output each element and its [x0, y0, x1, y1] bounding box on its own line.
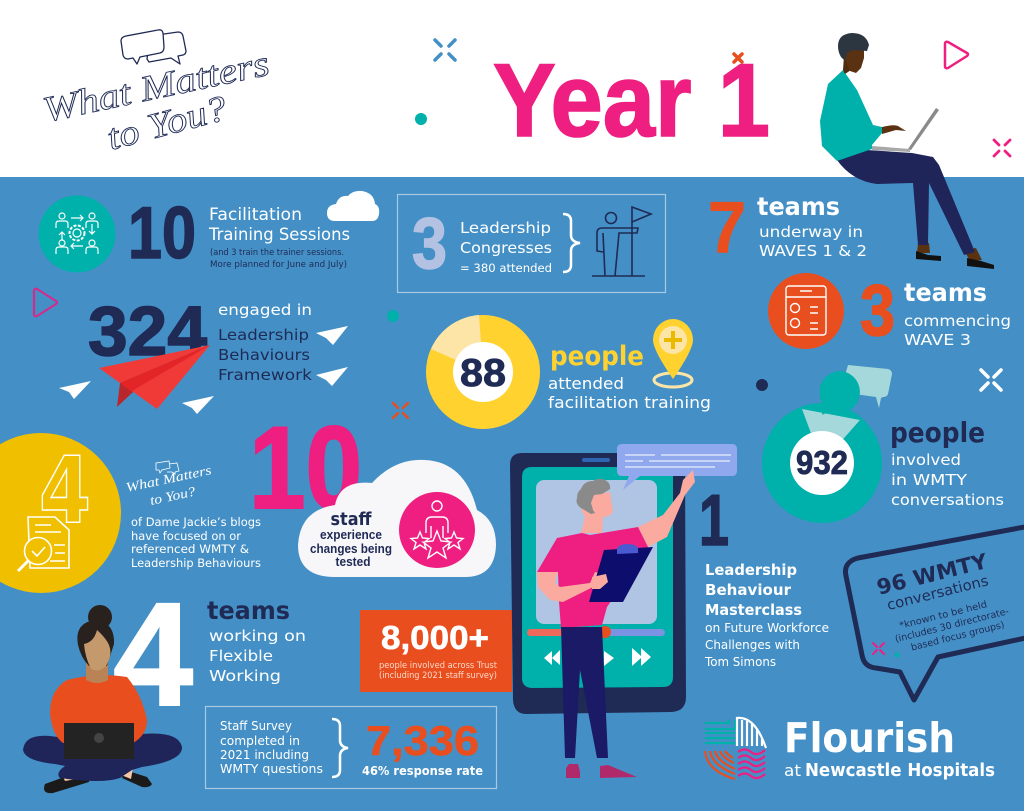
logo wording: What Matters	[39, 43, 273, 130]
donut chart: 932	[762, 403, 882, 523]
tablet	[510, 453, 686, 714]
masterclass text: Behaviour	[705, 581, 792, 599]
stat: 7 teams: WAVES 1 & 2	[759, 242, 867, 260]
engaged text	[218, 301, 312, 384]
cloud text: changes being	[310, 542, 392, 556]
stat: 10 staff experience changes	[249, 402, 496, 577]
stat: 4 teams flexible working: Flexible	[209, 647, 273, 665]
donut chart: 88	[426, 315, 540, 429]
engaged text: Framework	[218, 366, 312, 384]
cloud text: tested	[336, 555, 370, 569]
illustration: woman with laptop	[23, 605, 182, 793]
cloud text: experience	[320, 528, 382, 542]
outlined number 4: 4	[39, 437, 91, 544]
stat: 932 people: conversations	[891, 491, 1004, 509]
masterclass text: Leadership	[705, 561, 797, 579]
bubble text: conversations	[885, 573, 990, 614]
title: Year 1	[493, 43, 770, 159]
masterclass text: Masterclass	[705, 601, 802, 619]
bubble text: *known to be held	[898, 599, 988, 632]
pale speech bubble	[840, 365, 892, 408]
masterclass text: on Future Workforce	[705, 621, 829, 635]
text: teams	[207, 596, 290, 625]
donut chart: 88: 88	[460, 352, 506, 395]
stat: 3 teams: 3	[860, 271, 895, 351]
stat: 3 teams: WAVE 3	[904, 331, 971, 349]
number 10: 10	[249, 402, 362, 533]
decorative dots and marks	[387, 310, 1001, 418]
number 3: 3	[412, 204, 447, 284]
stat: 88 people: attended	[548, 374, 624, 393]
small note: (and 3 train the trainer sessions.	[210, 248, 344, 258]
survey text: WMTY questions	[220, 762, 323, 776]
stat: 7 teams: teams	[757, 192, 840, 221]
cloud text: staff	[330, 509, 372, 530]
icon: person with flag	[592, 207, 651, 276]
blog text: have focused on or	[131, 529, 241, 543]
engaged text: Leadership	[218, 326, 309, 344]
stat: 1 masterclass	[699, 481, 829, 669]
response rate: 46% response rate	[362, 763, 483, 778]
masterclass text	[704, 561, 829, 669]
brace	[563, 214, 580, 272]
congress text: Congresses	[460, 239, 552, 257]
callout: 8,000+: (including 2021 staff survey)	[379, 671, 497, 681]
stat: 324 engaged	[34, 289, 348, 414]
panel: leadership congresses	[398, 194, 666, 292]
stat: 4 teams flexible working	[113, 573, 306, 737]
icon: play triangle	[34, 289, 57, 316]
number 7,336: 7,336	[366, 717, 479, 764]
stat: 932 people: involved	[891, 451, 961, 469]
number 10: 10	[128, 193, 196, 274]
stat: 88 people: facilitation training	[548, 393, 711, 412]
stat: 88 people	[426, 315, 711, 429]
blog text: Leadership Behaviours	[131, 556, 261, 570]
logo: Flourish at Newcastle Hospitals: at	[784, 761, 801, 780]
masterclass text: Challenges with	[705, 638, 800, 652]
cloud	[298, 460, 496, 577]
survey text	[220, 719, 323, 776]
blog text	[131, 515, 261, 570]
congress text: = 380 attended	[460, 261, 552, 275]
survey text: Staff Survey	[220, 719, 292, 733]
bubble text	[874, 547, 1013, 658]
facilitation sessions stat: More planned for June and July)	[210, 260, 347, 270]
masterclass text: Tom Simons	[704, 655, 776, 669]
icon: red paper plane	[99, 345, 210, 409]
congress text	[460, 219, 552, 275]
text: people	[550, 341, 644, 372]
text: people	[890, 416, 985, 449]
small script logo: to You?	[149, 484, 197, 508]
number 324: 324	[88, 292, 207, 370]
logo wording	[39, 43, 273, 158]
stat: 4 teams flexible working: working on	[209, 627, 306, 645]
callout: 8,000+: people involved across Trust	[379, 661, 498, 671]
icon: document and magnifier	[18, 517, 69, 571]
panel: staff survey	[206, 706, 496, 788]
presenter	[537, 470, 695, 778]
callout: 96 WMTY conversations speech bubble	[846, 526, 1024, 700]
decorative header marks	[415, 40, 1010, 156]
stat: 3 teams: commencing	[904, 312, 1011, 330]
stat: 932 people	[762, 365, 1004, 523]
bubble text: 96 WMTY	[874, 549, 991, 600]
icon: speech bubbles	[121, 30, 186, 64]
stat: 4 teams flexible working: Working	[209, 667, 281, 685]
blog text: referenced WMTY &	[131, 542, 249, 556]
callout: 8,000+: 8,000+	[381, 619, 489, 656]
logo wording: to You?	[103, 88, 231, 158]
small script logo	[125, 461, 213, 508]
small marks	[873, 643, 900, 658]
yellow circle	[0, 433, 121, 593]
illustration: tablet and presenter	[510, 444, 737, 778]
cloud text	[310, 509, 392, 569]
blog text: of Dame Jackie’s blogs	[131, 515, 261, 529]
bubble text: based focus groups)	[910, 620, 1006, 654]
icon: checklist on orange circle	[768, 273, 844, 349]
blue background panel	[0, 177, 1024, 811]
illustration: man with laptop	[820, 33, 994, 269]
facilitation sessions stat: Training Sessions	[208, 225, 350, 244]
heading: Facilitation	[209, 205, 302, 224]
survey text: 2021 including	[220, 748, 309, 762]
panel: blogs	[0, 433, 261, 593]
bubble text: (includes 30 directorate-	[894, 606, 1010, 645]
brace	[332, 719, 348, 777]
stat: 7 teams: underway in	[759, 223, 863, 241]
facilitation sessions stat	[38, 191, 379, 274]
engaged text: Behaviours	[218, 346, 310, 364]
icon: person and stars	[399, 492, 475, 568]
icon: cloud	[327, 191, 379, 221]
stat: 3 teams	[768, 271, 1011, 351]
congress text: Leadership	[460, 219, 551, 237]
number 1: 1	[699, 481, 729, 561]
logo wording: Flourish	[784, 714, 955, 762]
stat: 3 teams: teams	[904, 278, 987, 307]
stat: 7 teams: 7	[708, 188, 746, 268]
donut chart: 932: 932	[796, 444, 848, 481]
speech bubble	[617, 444, 737, 490]
icon: location pin	[653, 319, 693, 387]
stat: 7 teams	[708, 188, 867, 268]
icon: white paper planes	[59, 326, 348, 414]
callout: 8,000+	[360, 610, 512, 692]
stat: 932 people: in WMTY	[891, 471, 968, 489]
icon: teal circle with people and gear	[38, 196, 116, 272]
logo: Flourish at Newcastle Hospitals	[705, 714, 995, 781]
small script logo: What Matters	[125, 462, 213, 495]
big number 4: 4	[113, 573, 193, 737]
teal speech bubble	[819, 371, 860, 415]
engaged text: engaged in	[218, 301, 312, 319]
script logo: What Matters to You?	[39, 30, 273, 158]
logo: Flourish at Newcastle Hospitals: Newcastle Hospitals	[805, 760, 995, 781]
survey text: completed in	[220, 734, 300, 748]
logo mark	[705, 718, 766, 779]
